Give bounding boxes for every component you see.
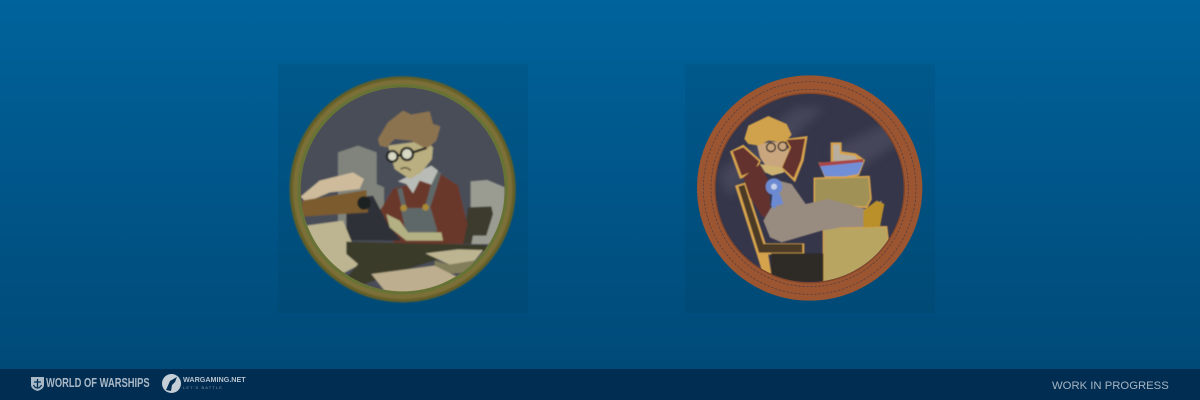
panel: left badge typist [278,64,528,313]
tagline: LET'S BATTLE [183,385,223,390]
hair [744,116,792,146]
arms behind head [730,136,808,182]
roller [302,190,371,217]
hair [378,111,440,149]
shoe [863,201,884,227]
paper on roller [301,172,364,202]
logo: Wargaming.net: WARGAMING.NET [183,375,246,384]
badge scene [300,87,505,292]
chair [735,182,804,281]
collar [760,164,784,176]
icon: anchor shield [31,377,44,391]
overalls [397,171,441,235]
head [388,141,433,179]
panel: right badge relaxed boy [685,64,935,313]
badge scene [716,94,904,282]
head [757,141,789,167]
chair [463,206,493,244]
papers on desk [370,248,484,292]
dark under legs [771,253,823,282]
desk [341,242,486,284]
paper hanging [306,221,361,273]
work in progress label: WORK IN PROGRESS [1052,380,1169,392]
collar [398,166,438,193]
mouth [401,168,411,171]
blue ribbon [766,178,783,209]
glasses [767,142,787,152]
jacket [743,164,771,218]
overalls and legs [763,179,882,242]
logo: World of Warships: WORLD OF WARSHIPS [46,376,150,390]
leather rim [697,75,922,301]
typewriter [346,196,401,241]
footer bar [0,369,1200,400]
hands [386,214,443,241]
boy torso [378,172,467,244]
icon: wargaming wolf [162,374,181,393]
paper stacks [338,146,505,244]
badge rim [290,76,516,302]
lower paper stack [823,227,888,282]
upper paper stack [814,177,871,207]
toy ship [818,142,865,178]
glasses [387,148,426,162]
